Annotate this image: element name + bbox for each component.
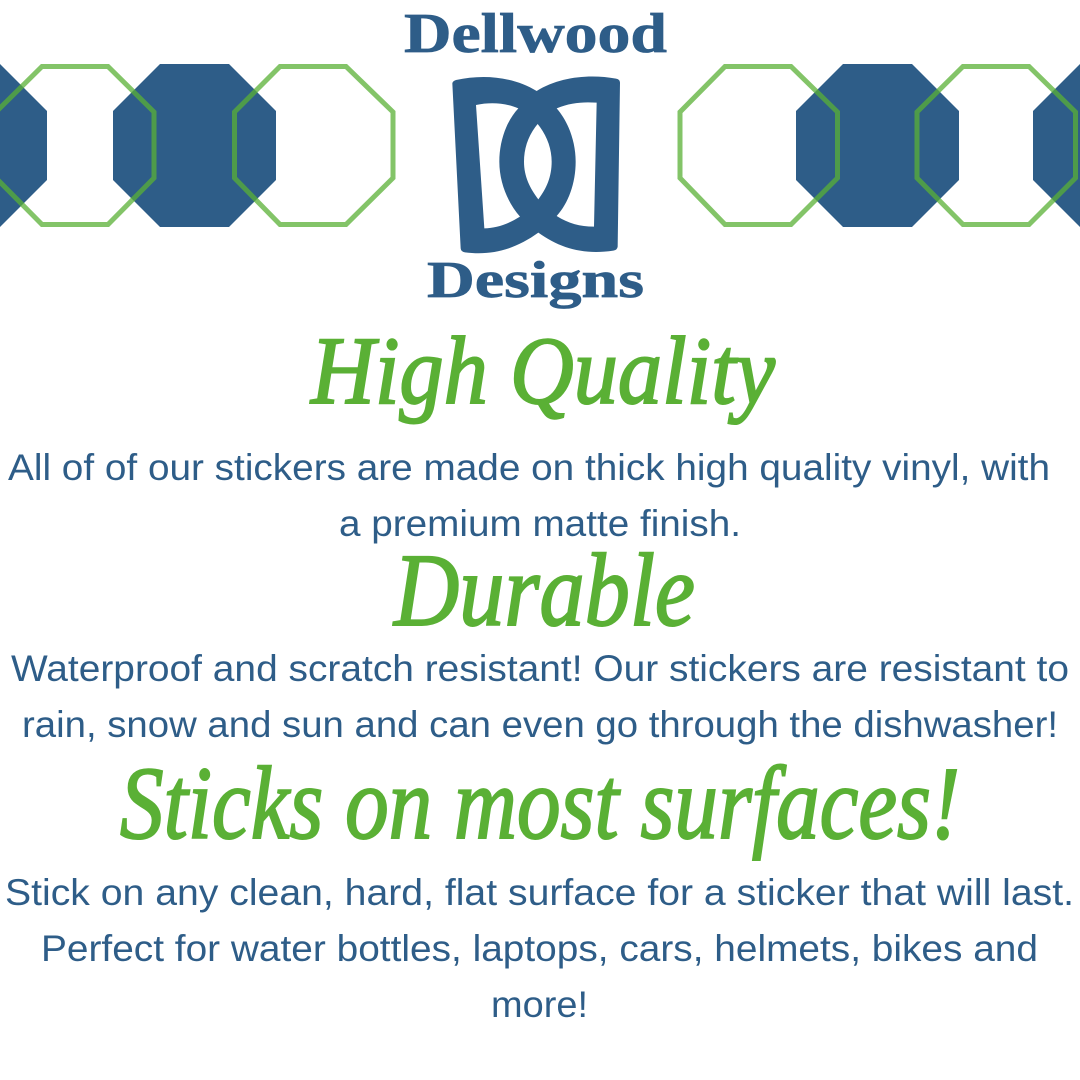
octagon band: right xyxy=(680,64,1080,227)
text block: surfaces description xyxy=(5,872,1074,1025)
octagon band: left xyxy=(0,64,393,227)
logo mark: interlocked D shapes xyxy=(452,77,620,253)
text block: durable description xyxy=(11,648,1069,745)
text block: high quality description: All of of our stickers are made on thick high quality vinyl, with xyxy=(8,447,1050,488)
text block: high quality description xyxy=(8,447,1050,544)
logo wordmark: Designs: Designs xyxy=(427,252,644,309)
text block: surfaces description: more! xyxy=(491,984,588,1025)
text block: high quality description: a premium matte finish. xyxy=(339,503,741,544)
text block: durable description: rain, snow and sun and can even go through the dishwasher! xyxy=(22,704,1058,745)
text block: surfaces description: Perfect for water bottles, laptops, cars, helmets, bikes and xyxy=(41,928,1038,969)
text block: durable description: Waterproof and scratch resistant! Our stickers are resistant to xyxy=(11,648,1069,689)
heading: High Quality: High Quality xyxy=(309,317,775,424)
logo wordmark: Dellwood: Dellwood xyxy=(404,3,667,65)
heading: Durable: Durable xyxy=(392,533,695,648)
text block: surfaces description: Stick on any clean, hard, flat surface for a sticker that will last. xyxy=(5,872,1074,913)
